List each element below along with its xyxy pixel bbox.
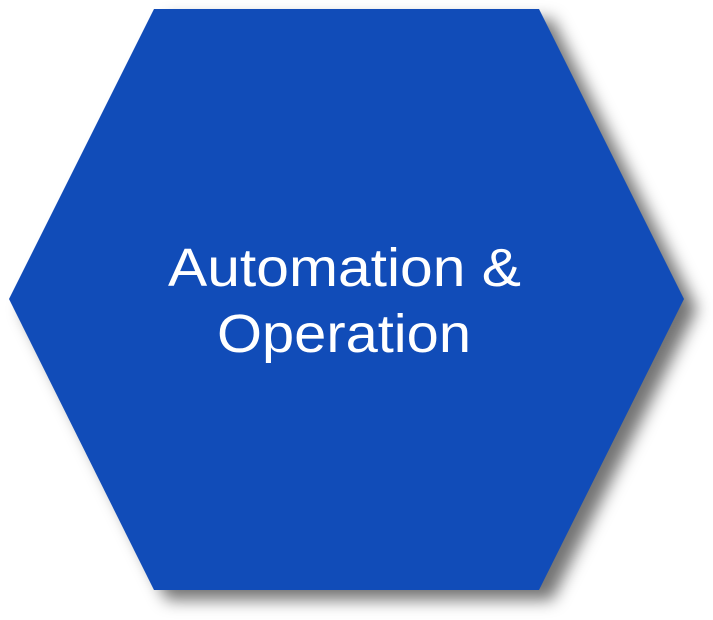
hexagon label xyxy=(168,238,521,364)
label line 1: Automation & xyxy=(168,238,521,298)
label line 2: Operation xyxy=(217,304,471,364)
